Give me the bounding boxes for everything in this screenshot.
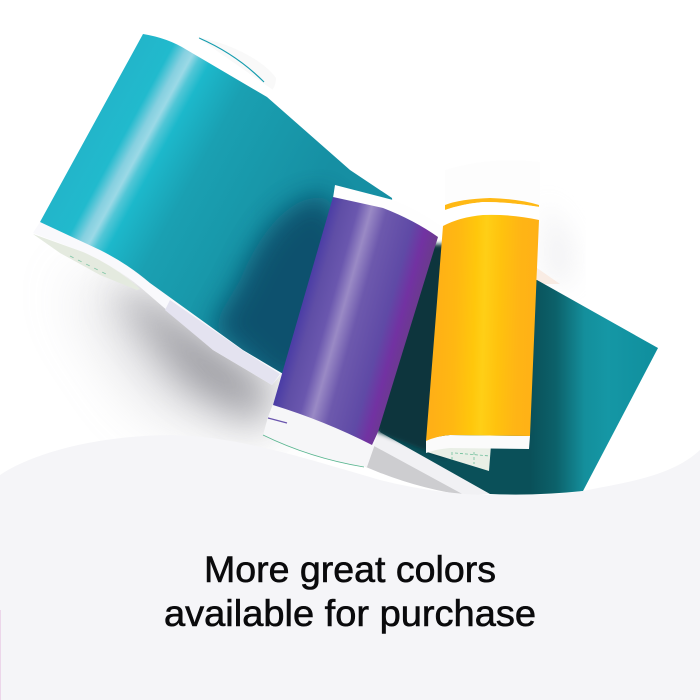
yellow roll: yellow top stripe [445, 198, 539, 210]
purple roll: underside liner [263, 435, 364, 467]
yellow roll [426, 160, 540, 471]
ribbon: white backing edge and hub [33, 33, 395, 385]
ribbon underside with printed grid [33, 234, 140, 290]
heading [164, 548, 536, 634]
yellow roll: white bottom band [426, 435, 530, 453]
purple roll: white bottom band and end [263, 404, 378, 467]
left edge tint [0, 610, 1, 700]
ribbon: strip of white backing near the lower edge [355, 430, 490, 496]
yellow roll: liner sheet with grid [427, 445, 491, 471]
dark gap between rolls [372, 244, 456, 458]
ribbon: teal panel on the right [372, 244, 658, 495]
purple roll: body [273, 197, 438, 445]
purple roll [263, 185, 442, 467]
yellow roll: white band [443, 202, 540, 227]
heading line 1: More great colors [204, 548, 496, 590]
purple roll: white top band [333, 185, 442, 240]
yellow roll: body [426, 215, 539, 441]
ribbon: large teal panel [40, 34, 400, 432]
soft drop shadow under ribbon [70, 200, 572, 440]
purple roll: inner purple sliver [268, 418, 287, 423]
curved pale panel [0, 435, 700, 700]
yellow roll: faded white top [445, 160, 540, 210]
heading line 2: available for purchase [164, 592, 536, 634]
